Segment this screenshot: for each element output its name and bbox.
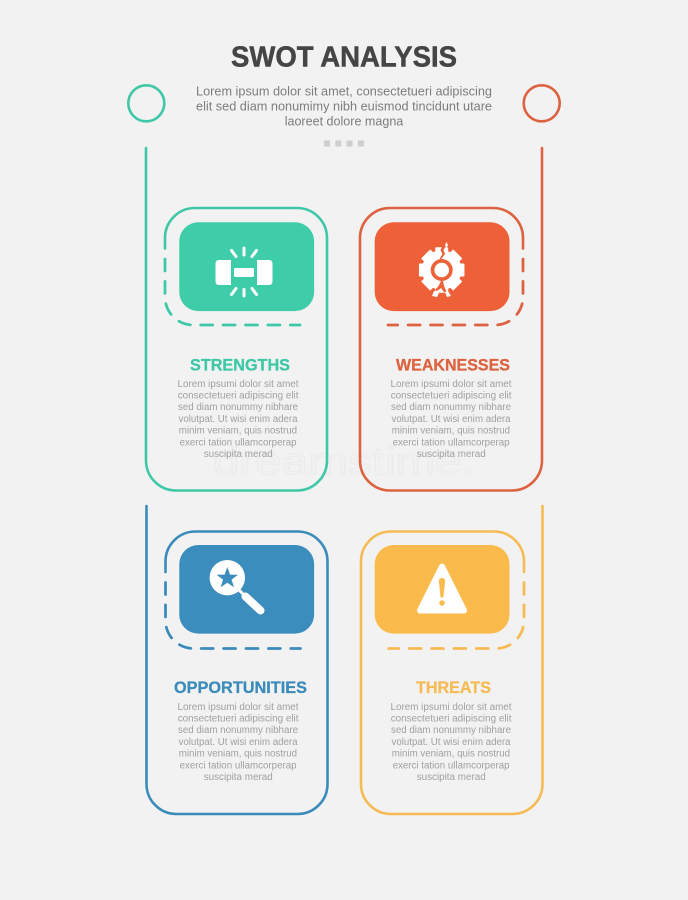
opportunities body text: exerci tation ullamcorperap: [180, 760, 297, 771]
weaknesses body text: suscipita merad: [417, 449, 486, 460]
threats body text: sed diam nonummy nibhare: [391, 725, 511, 736]
weaknesses body text: volutpat. Ut wisi enim adera: [392, 414, 511, 425]
opportunities outline: [146, 506, 328, 814]
icon: broken link: [216, 248, 272, 296]
strengths body text: volutpat. Ut wisi enim adera: [178, 414, 298, 425]
panel: weaknesses: [360, 148, 542, 490]
strengths body text: minim veniam, quis nostrud: [179, 426, 297, 437]
title: SWOT ANALYSIS: [231, 42, 457, 74]
circle marker: teal: [128, 85, 164, 121]
subtitle text block: [196, 84, 492, 128]
threats outline: [361, 506, 542, 814]
pagination dots: [324, 140, 364, 146]
opportunities body text: suscipita merad: [204, 772, 273, 783]
strengths body text: Lorem ipsumi dolor sit amet: [178, 379, 299, 390]
panel: opportunities: [146, 506, 328, 814]
threats heading: THREATS: [416, 679, 491, 697]
opportunities body text: volutpat. Ut wisi enim adera: [178, 737, 298, 748]
strengths outline: [146, 148, 327, 490]
weaknesses body text: Lorem ipsumi dolor sit amet: [390, 379, 512, 390]
icon: warning triangle: [420, 566, 464, 610]
panel: threats: [361, 506, 542, 814]
subtitle text block: Lorem ipsum dolor sit amet, consectetueri adipiscing: [196, 84, 492, 98]
weaknesses heading: WEAKNESSES: [396, 356, 510, 374]
weaknesses dashed line: [388, 259, 523, 325]
weaknesses body text: sed diam nonummy nibhare: [391, 402, 511, 413]
threats dashed line: [388, 582, 524, 648]
strengths body text: sed diam nonummy nibhare: [178, 402, 298, 413]
watermark: dreamstime.: [213, 441, 475, 483]
opportunities body text: Lorem ipsumi dolor sit amet: [178, 702, 299, 713]
circle marker: orange: [524, 85, 560, 121]
subtitle text block: elit sed diam nonumimy nibh euismod tincidunt utare: [196, 98, 492, 114]
strengths body text: consectetueri adipiscing elit: [178, 390, 299, 402]
icon: cracked gear: [420, 242, 464, 297]
opportunities heading: OPPORTUNITIES: [174, 679, 307, 697]
weaknesses icon box: [375, 222, 510, 311]
icon: magnifier with star: [210, 560, 260, 610]
opportunities icon box: [179, 545, 314, 634]
threats body text: consectetueri adipiscing elit: [391, 714, 512, 724]
threats body text: volutpat. Ut wisi enim adera: [392, 737, 511, 748]
subtitle text block: laoreet dolore magna: [285, 114, 404, 128]
weaknesses body text: exerci tation ullamcorperap: [393, 437, 510, 448]
threats body text: Lorem ipsumi dolor sit amet: [390, 702, 512, 713]
strengths body text: suscipita merad: [204, 449, 273, 460]
threats icon box: [375, 545, 510, 634]
opportunities body text: consectetueri adipiscing elit: [178, 714, 299, 724]
threats body text: exerci tation ullamcorperap: [393, 760, 510, 771]
opportunities body text: minim veniam, quis nostrud: [179, 749, 297, 760]
strengths icon box: [179, 222, 314, 311]
threats body text: minim veniam, quis nostrud: [392, 749, 510, 760]
opportunities body text: [178, 702, 299, 783]
weaknesses outline: [360, 148, 542, 490]
threats body text: [390, 702, 512, 783]
strengths body text: [178, 379, 299, 460]
opportunities body text: sed diam nonummy nibhare: [178, 725, 298, 736]
strengths body text: exerci tation ullamcorperap: [180, 437, 297, 448]
strengths dashed line: [165, 259, 300, 325]
weaknesses body text: minim veniam, quis nostrud: [392, 426, 510, 437]
opportunities dashed line: [166, 582, 300, 648]
weaknesses body text: consectetueri adipiscing elit: [391, 390, 512, 402]
strengths heading: STRENGTHS: [190, 356, 290, 374]
panel: strengths: [146, 148, 327, 490]
weaknesses body text: [390, 379, 512, 460]
threats body text: suscipita merad: [417, 772, 486, 783]
